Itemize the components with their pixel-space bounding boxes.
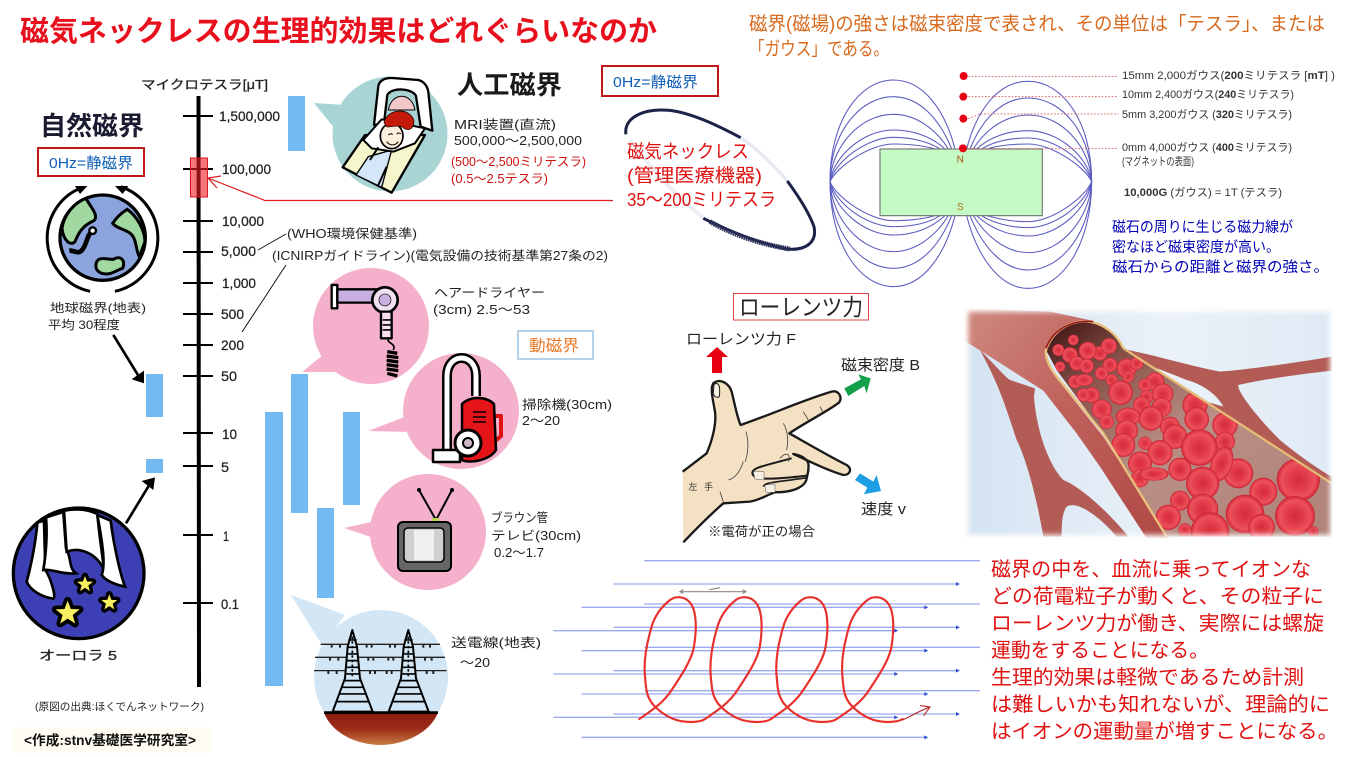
text: power lines: 送電線(地表) (451, 635, 541, 650)
text: explanation of helical motion: 磁界の中を、血流に乗ってイオンな (991, 558, 1311, 581)
text: guideline notes: (WHO環境保健基準) (287, 226, 417, 241)
text: explanation of helical motion: どの荷電粒子が動くと、その粒子に (991, 585, 1324, 608)
text: distance and gauss values: 5mm 3,200ガウス (320ミリテスラ) (1122, 108, 1292, 121)
diagram: bar magnet field lines (830, 72, 1118, 288)
heading box: Lorentz force: ローレンツ力 (739, 294, 863, 320)
axis line and ticks (183, 96, 213, 687)
note: positive charge: ※電荷が正の場合 (708, 524, 815, 539)
credit (14, 727, 210, 753)
axis tick labels: 50 (221, 368, 237, 384)
measurement dots (959, 72, 968, 152)
icon: MRI patient (343, 78, 432, 193)
text: vacuum cleaner: 2〜20 (522, 414, 560, 428)
axis tick labels: 10,000 (222, 213, 264, 229)
vessel branches (980, 350, 1332, 537)
helix path (639, 597, 930, 722)
bubble: television (344, 474, 486, 590)
icon: left hand (683, 381, 850, 542)
heading: artificial magnetic field: 人工磁界 (457, 70, 562, 100)
magnetic necklace range marker (190, 158, 208, 197)
icon: earth (47, 186, 158, 291)
arrow: aurora to bar (126, 477, 155, 523)
label box: 0Hz static field left (38, 148, 144, 176)
label box: dynamic field (518, 331, 593, 359)
arrow: force up (706, 347, 728, 373)
text: explanation of helical motion: 運動をすることになる。 (991, 639, 1209, 662)
arrow: necklace range pointer (208, 176, 613, 200)
bubble: vacuum cleaner (368, 353, 519, 469)
text: field line note: 磁石からの距離と磁界の強さ。 (1112, 259, 1329, 276)
icon: television (398, 488, 454, 571)
label box: dynamic field: 動磁界 (529, 337, 579, 355)
credit: <作成:stnv基礎医学研究室> (24, 732, 196, 748)
text: MRI values: 500,000〜2,500,000 (454, 134, 582, 148)
front vessel wall (963, 308, 1169, 538)
icon: left hand: 手 (704, 481, 713, 492)
icon: vacuum cleaner (433, 358, 501, 462)
text: distance and gauss values: 10,000G (ガウス) = 1T (テスラ) (1124, 186, 1282, 199)
diagram: left hand rule (683, 331, 920, 542)
axis tick labels: 500 (221, 306, 244, 322)
label box: 0Hz static field right: 0Hz=静磁界 (613, 74, 698, 91)
axis tick labels: 5 (221, 459, 229, 475)
label: velocity v: 速度 v (861, 501, 907, 518)
arrow: flux density (844, 374, 871, 396)
bubble: hair dryer (302, 268, 429, 384)
diagram: helical ion motion (553, 561, 980, 739)
text: hair dryer (433, 286, 545, 317)
label box: 0Hz static field right (602, 66, 718, 96)
arrow: earth to bar (113, 335, 144, 383)
magnet block (880, 149, 1042, 216)
text: field line note: 磁石の周りに生じる磁力線が (1112, 219, 1293, 236)
diagram: bar magnet field lines: S (957, 202, 964, 213)
text: explanation of helical motion: はイオンの運動量が増すことになる。 (991, 720, 1338, 743)
label box: 0Hz static field left: 0Hz=静磁界 (49, 155, 133, 172)
text: guideline notes (242, 226, 608, 332)
text: MRI values: (500〜2,500ミリテスラ) (451, 155, 586, 169)
title: 磁気ネックレスの生理的効果はどれぐらいなのか (20, 15, 657, 48)
text: explanation of helical motion: は難しいかも知れないが、理論的に (991, 693, 1330, 716)
axis tick labels: 100,000 (222, 161, 271, 177)
axis tick labels: 10 (222, 426, 237, 442)
axis tick labels: 1,500,000 (219, 108, 280, 124)
text: explanation of helical motion: 生理的効果は軽微であるため計測 (991, 666, 1304, 689)
text: hair dryer: ヘアードライヤー (434, 286, 545, 300)
cut edge (1046, 321, 1167, 537)
text: explanation of helical motion (991, 558, 1338, 743)
text: power lines (451, 635, 541, 670)
text: television: ブラウン管 (491, 510, 548, 525)
text: magnetic flux density explanation: 磁界(磁場)の強さは磁束密度で表され、その単位は「テスラ」、または (749, 13, 1325, 35)
bubble: MRI (314, 76, 448, 193)
text: vacuum cleaner (522, 397, 612, 428)
text: MRI values: (0.5〜2.5テスラ) (451, 172, 548, 186)
label: flux density B: 磁束密度 B (841, 357, 920, 374)
text: MRI values: MRI装置(直流) (454, 117, 556, 132)
text: television (491, 510, 581, 560)
range bars (146, 96, 360, 686)
text: field line note: 密なほど磁束密度が高い。 (1112, 239, 1280, 256)
heading: natural magnetic field: 自然磁界 (40, 111, 144, 141)
panel: microtesla scale chart (141, 78, 360, 687)
icon: left hand: 左 (688, 481, 697, 492)
text: necklace caption: 35〜200ミリテスラ (627, 189, 776, 210)
text: hair dryer: (3cm) 2.5〜53 (433, 303, 530, 317)
icon: power towers (314, 630, 447, 745)
text: magnetic flux density explanation (749, 13, 1325, 60)
label: force F: ローレンツ力 F (686, 331, 796, 348)
axis tick labels (219, 108, 280, 612)
pitch marker (680, 588, 746, 594)
text: television: 0.2〜1.7 (494, 546, 544, 560)
text: explanation of helical motion: ローレンツ力が働き、実際には螺旋 (991, 612, 1324, 635)
text: power lines: 〜20 (460, 656, 490, 670)
arrow: velocity (855, 473, 881, 494)
magnetic field lines (553, 561, 980, 737)
text: guideline notes: (ICNIRPガイドライン)(電気設備の技術基準第27条の2) (272, 248, 608, 263)
text: vacuum cleaner: 掃除機(30cm) (522, 397, 612, 412)
text: distance and gauss values: (マグネットの表面) (1122, 154, 1194, 168)
axis tick labels: 1,000 (222, 275, 256, 291)
pole labels: N (957, 154, 964, 165)
text: necklace caption: (管理医療機器) (627, 165, 762, 186)
text: distance and gauss values: 15mm 2,000ガウス( 200ミリテスラ [ mT] ) (1122, 69, 1335, 82)
field lines (830, 80, 1092, 288)
caption: aurora: オーロラ 5 (39, 648, 117, 663)
icon: aurora (13, 508, 144, 639)
axis tick labels: 1 (223, 528, 229, 544)
text: distance and gauss values: 10mm 2,400ガウス(240ミリテスラ) (1122, 88, 1294, 101)
axis label: マイクロテスラ[μT] (141, 78, 268, 92)
text: necklace caption (627, 141, 776, 210)
red blood cells (1052, 335, 1320, 551)
text: necklace caption: 磁気ネックレス (627, 141, 749, 162)
icon: hair dryer (332, 285, 398, 376)
vessel interior (1046, 323, 1332, 537)
field arrowheads (894, 582, 960, 739)
axis tick labels: 200 (221, 337, 244, 353)
text: field line note (1112, 219, 1329, 276)
axis tick labels: 5,000 (221, 243, 256, 259)
axis tick labels: 0.1 (221, 596, 239, 612)
caption: earth magnetic field: 地球磁界(地表) (50, 300, 146, 315)
image: magnetic necklace (626, 110, 815, 249)
text: magnetic flux density explanation: 「ガウス」である。 (749, 38, 889, 60)
dotted leader lines (968, 77, 1118, 149)
text: distance and gauss values: 0mm 4,000ガウス (400ミリテスラ) (1122, 141, 1292, 154)
source note: (原図の出典:ほくでんネットワーク) (35, 700, 204, 713)
caption: earth magnetic field (48, 300, 146, 332)
text: distance and gauss values (1122, 69, 1335, 199)
caption: earth magnetic field: 平均 30程度 (48, 317, 120, 332)
image: blood vessel with red blood cells (963, 307, 1335, 551)
text: MRI values (451, 117, 586, 186)
text: television: テレビ(30cm) (491, 529, 581, 543)
bubble: power lines (291, 595, 448, 745)
